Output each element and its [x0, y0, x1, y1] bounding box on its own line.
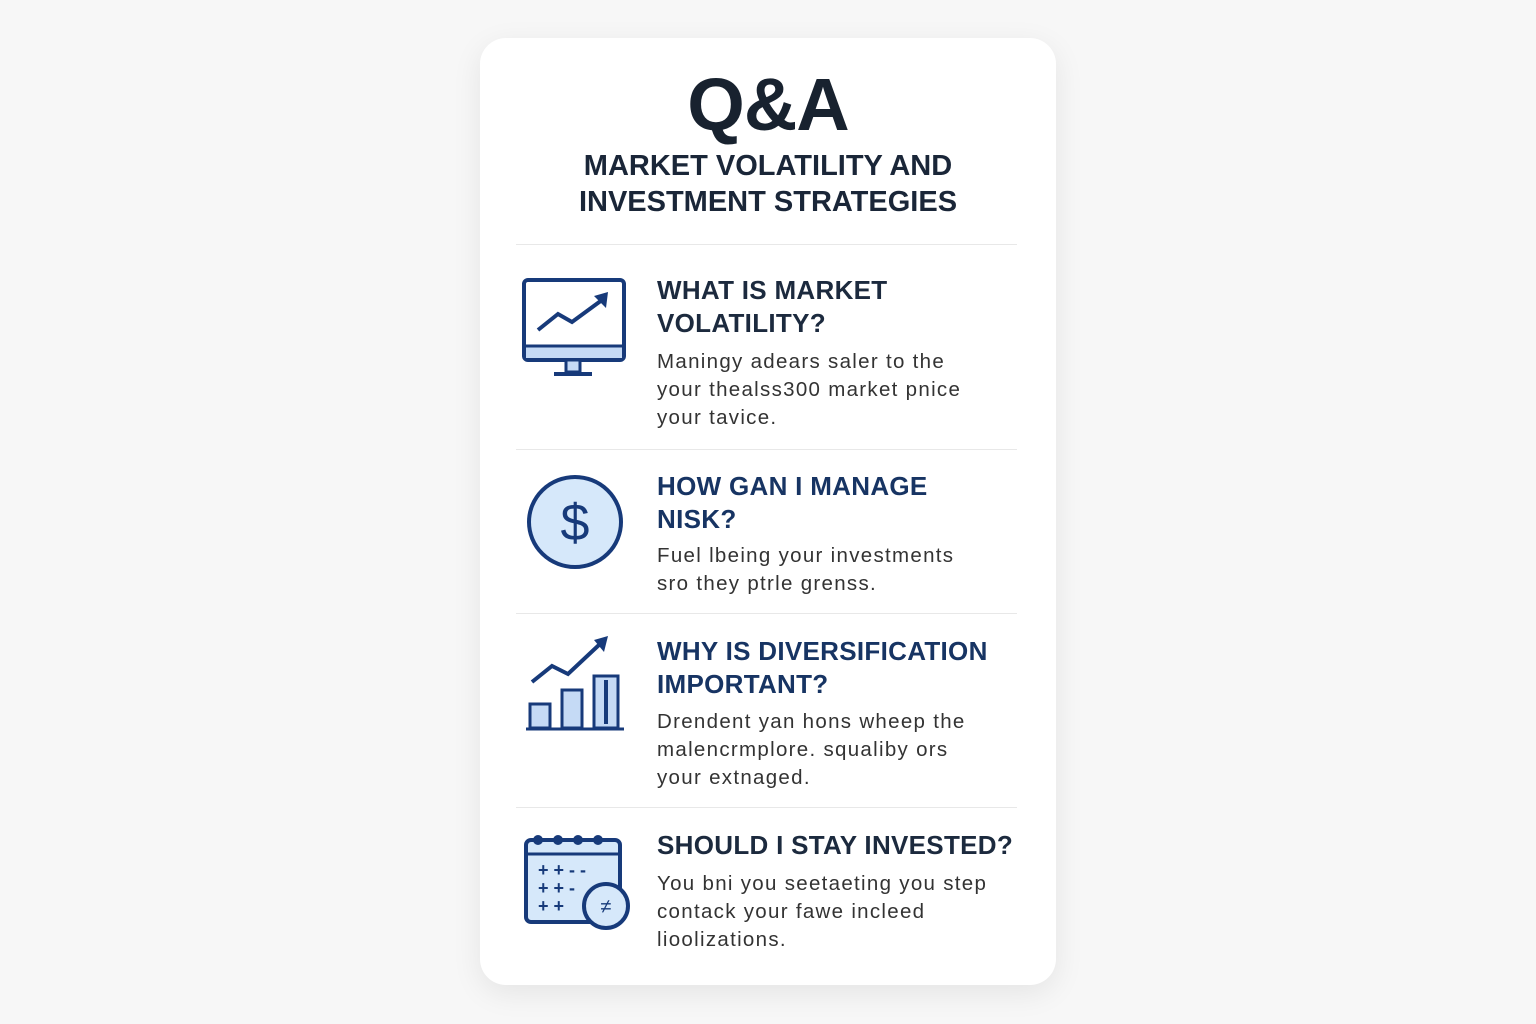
- body 4: You bni you seetaeting you step: [657, 872, 987, 895]
- body 3: [657, 710, 966, 789]
- subtitle: INVESTMENT STRATEGIES: [579, 186, 957, 218]
- body 3: Drendent yan hons wheep the: [657, 710, 966, 733]
- heading 2: HOW GAN I MANAGE: [657, 471, 928, 501]
- icon: calendar: + + -: [538, 878, 575, 898]
- body 3: malencrmplore. squaliby ors: [657, 738, 948, 761]
- title: Q&A: [687, 63, 849, 146]
- icon: calendar: ≠: [601, 896, 612, 918]
- body 4: [657, 872, 987, 951]
- body 3: your extnaged.: [657, 766, 811, 789]
- body 1: Maningy adears saler to the: [657, 350, 945, 373]
- icon: calendar: + +: [538, 896, 564, 916]
- icon: calendar: + + - -: [538, 860, 586, 880]
- icon: dollar coin: $: [561, 494, 590, 552]
- icon: dollar coin: [527, 475, 623, 569]
- heading 1: WHAT IS MARKET: [657, 275, 887, 305]
- heading 2: NISK?: [657, 504, 736, 534]
- heading 3: IMPORTANT?: [657, 669, 828, 699]
- heading 1: VOLATILITY?: [657, 308, 826, 338]
- heading 3: [657, 636, 988, 699]
- heading 3: WHY IS DIVERSIFICATION: [657, 636, 988, 666]
- body 1: your tavice.: [657, 406, 777, 429]
- body 4: lioolizations.: [657, 928, 787, 951]
- heading 2: [657, 471, 928, 534]
- icon: bar chart: [526, 636, 624, 730]
- body 2: Fuel lbeing your investments: [657, 544, 954, 567]
- heading 4: SHOULD I STAY INVESTED?: [657, 830, 1013, 860]
- icon: calendar: [524, 835, 630, 930]
- body 2: [657, 544, 954, 595]
- body 1: [657, 350, 961, 429]
- body 1: your thealss300 market pnice: [657, 378, 961, 401]
- card: [480, 38, 1056, 985]
- subtitle: MARKET VOLATILITY AND: [584, 150, 952, 182]
- icon: monitor chart: [522, 278, 626, 376]
- body 4: contack your fawe incleed: [657, 900, 925, 923]
- heading 1: [657, 275, 887, 338]
- body 2: sro they ptrle grenss.: [657, 572, 877, 595]
- subtitle: [579, 150, 957, 218]
